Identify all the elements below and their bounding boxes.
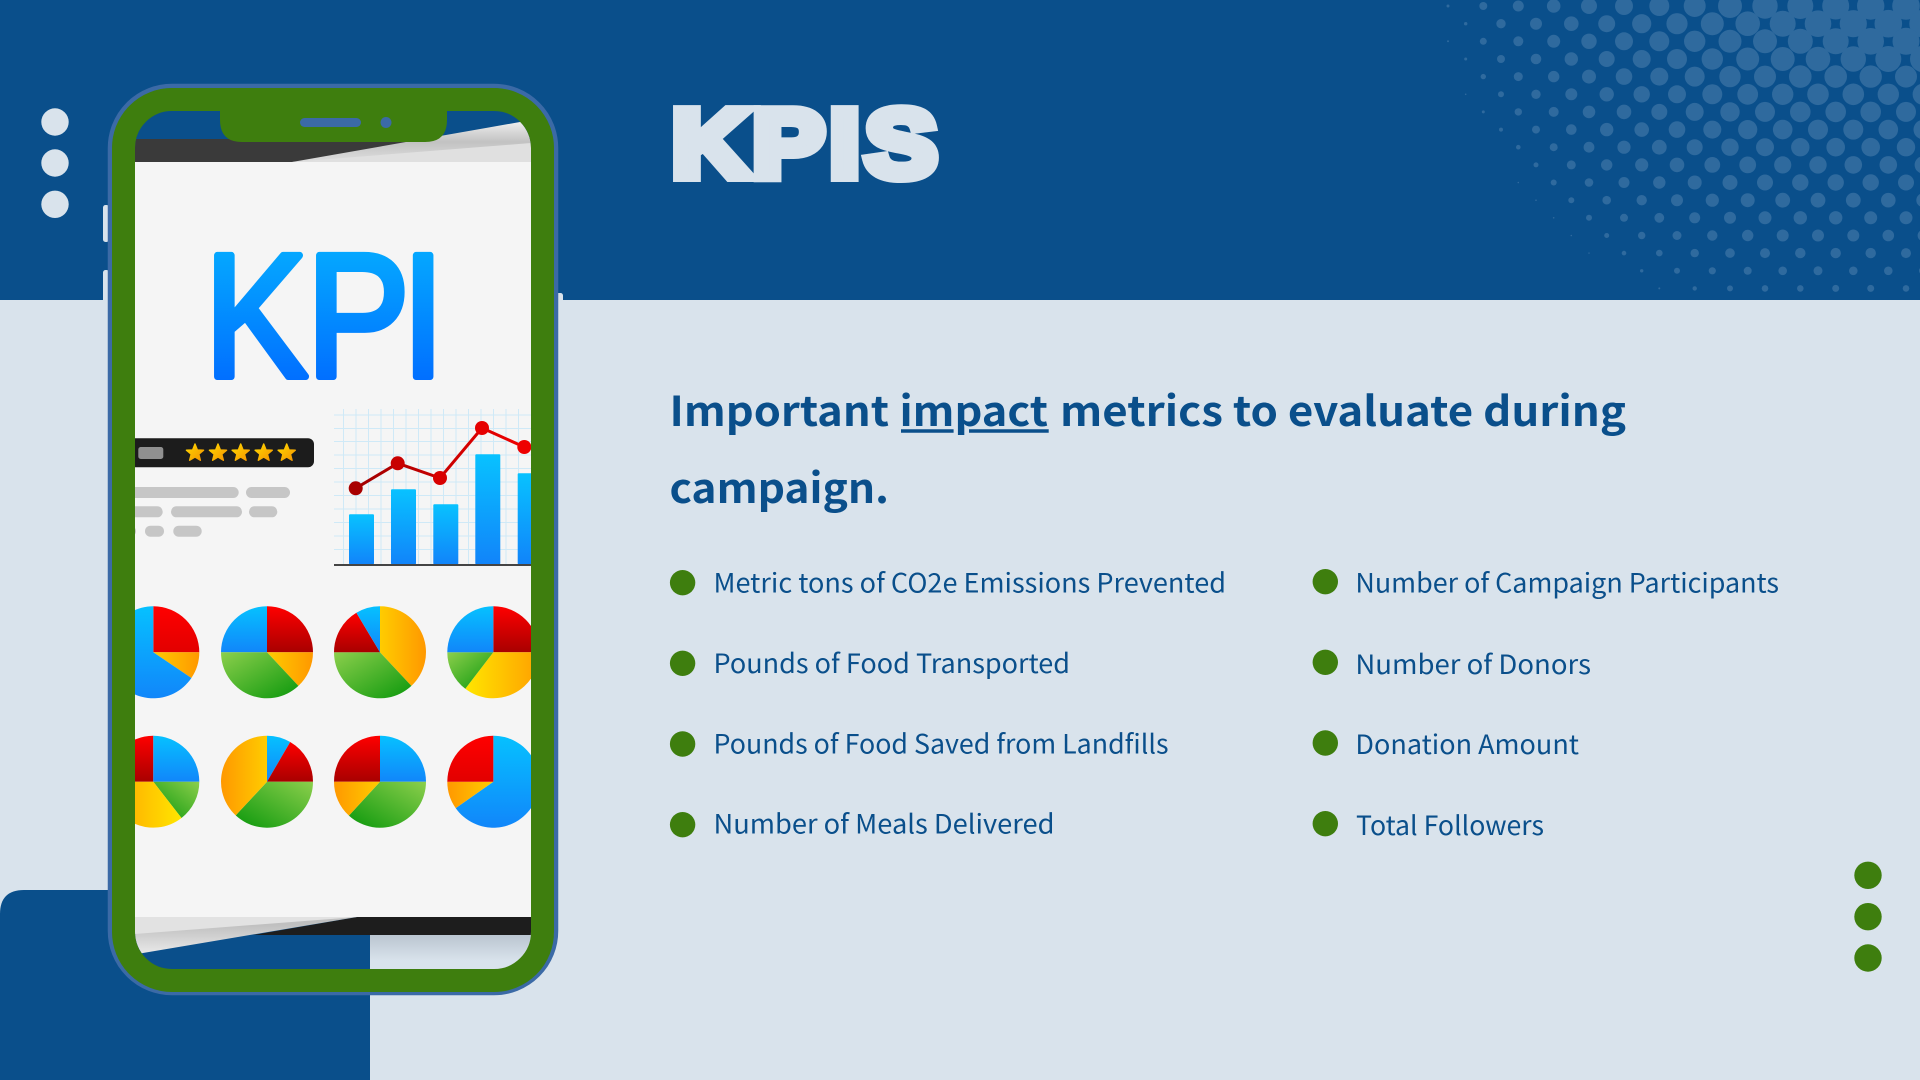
white page bbox=[135, 162, 531, 917]
bottom shadow bbox=[370, 935, 531, 954]
item: Pounds of Food Saved from Landfills bbox=[714, 723, 1168, 762]
bullet bbox=[670, 651, 695, 676]
bullet bbox=[670, 570, 695, 595]
KPI list column 1 bbox=[670, 562, 1226, 842]
trend line bbox=[360, 429, 519, 486]
bullet bbox=[670, 812, 695, 837]
pie chart row 1 col 4 bbox=[447, 606, 539, 698]
bottom dark band bbox=[253, 917, 531, 935]
pie chart row 2 col 3 bbox=[334, 736, 426, 828]
side buttons bbox=[103, 205, 563, 313]
phone green frame bbox=[124, 100, 542, 980]
trend points bbox=[349, 421, 531, 495]
phone outer edge bbox=[110, 86, 556, 993]
pie chart row 1 col 3 bbox=[334, 606, 426, 698]
bullet bbox=[1313, 811, 1338, 836]
green dots bbox=[1854, 862, 1882, 972]
top fold light edge bbox=[292, 143, 531, 162]
title: KPIS bbox=[672, 90, 937, 197]
smartphone bbox=[103, 86, 563, 993]
KPI large text: KPI bbox=[204, 218, 445, 415]
bottom fold light edge bbox=[135, 917, 357, 934]
stars bbox=[186, 444, 295, 460]
bullet bbox=[1313, 569, 1338, 594]
speaker bbox=[300, 118, 361, 127]
header band bbox=[0, 0, 1920, 300]
top page fold bbox=[292, 122, 540, 162]
bullet bbox=[1313, 650, 1338, 675]
item: Number of Campaign Participants bbox=[1355, 562, 1779, 601]
placeholder text lines bbox=[120, 487, 290, 537]
item: Total Followers bbox=[1356, 804, 1544, 843]
camera bbox=[380, 117, 392, 128]
underline: impact bbox=[901, 429, 1049, 433]
notch bbox=[220, 105, 447, 142]
pie chart row 1 col 2 bbox=[221, 606, 313, 698]
item: Donation Amount bbox=[1355, 723, 1579, 762]
bars bbox=[349, 454, 543, 564]
subheading: campaign. bbox=[670, 455, 889, 515]
bar and line chart bbox=[334, 409, 543, 566]
bullet bbox=[670, 731, 695, 757]
axis bbox=[334, 564, 531, 566]
KPI list column 2 bbox=[1313, 562, 1779, 843]
top dark band bbox=[135, 139, 531, 162]
pie chart row 2 col 1 bbox=[135, 736, 200, 828]
item: Pounds of Food Transported bbox=[714, 642, 1070, 681]
halftone dot pattern bbox=[1446, 0, 1920, 292]
item: Number of Meals Delivered bbox=[714, 803, 1054, 842]
pie chart row 1 col 1 bbox=[135, 606, 200, 698]
bullet bbox=[1313, 730, 1338, 756]
item: Metric tons of CO2e Emissions Prevented bbox=[714, 562, 1226, 601]
subheading bbox=[670, 378, 1626, 515]
white dots bbox=[41, 108, 69, 218]
pie chart row 2 col 4 bbox=[447, 736, 539, 828]
rating bar bbox=[120, 438, 314, 467]
subheading: impact bbox=[900, 378, 1048, 438]
item: Number of Donors bbox=[1355, 643, 1591, 682]
screen content bbox=[107, 122, 543, 961]
bottom fold bbox=[135, 917, 357, 955]
subheading: Important bbox=[670, 378, 889, 438]
bottom-left blue block bbox=[0, 890, 370, 1080]
pie chart row 2 col 2 bbox=[221, 736, 313, 828]
subheading: metrics to evaluate during bbox=[1060, 378, 1626, 438]
